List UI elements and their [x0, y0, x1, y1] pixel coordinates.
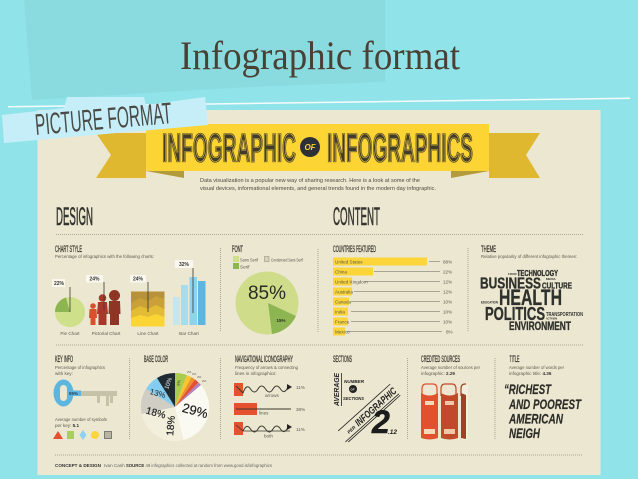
country percentages: 22% [443, 270, 452, 274]
panel: font [232, 244, 304, 334]
both row [234, 422, 305, 438]
chart captions: Pie Chart [60, 331, 80, 336]
value flags [52, 260, 193, 313]
font pie chart [236, 272, 298, 334]
panel: theme word cloud: THEME [481, 244, 496, 255]
panel: theme word cloud: EDUCATION [481, 300, 498, 304]
quote sample: AMERICAN [508, 410, 564, 426]
country bars [333, 258, 427, 336]
footer credits: CONCEPT & DESIGN Ivan Cash [55, 463, 125, 468]
base colour pie chart: 29% [181, 400, 210, 421]
panel: sections: SECTIONS [333, 354, 352, 365]
per infographic diagonal: INFOGRAPHIC [353, 386, 400, 429]
value 2.12 [371, 404, 397, 440]
arrows row [234, 383, 305, 398]
slide title: Infographic format [180, 33, 460, 78]
average typography: SECTIONS [343, 396, 364, 401]
base colour pie chart: 13% [149, 387, 167, 400]
panel: key info [53, 354, 117, 440]
banner of badge: OF [304, 143, 317, 152]
base colour pie chart: 18% [145, 406, 167, 422]
panel: title: TITLE [510, 354, 520, 365]
country percentages: 8% [446, 330, 453, 334]
country names: Mexico [335, 330, 350, 334]
panel: chart style: Percentage of infographics with the following charts: [55, 254, 154, 259]
panel: theme word cloud: POLITICS [485, 304, 545, 324]
country percentages [443, 260, 453, 334]
panel: base color [141, 354, 210, 441]
panel: title: Average number of words per [509, 365, 564, 370]
chart captions: Line Chart [137, 331, 159, 336]
country names: China [335, 270, 347, 274]
panel: navigational iconography [234, 354, 305, 438]
country names: Australia [335, 290, 353, 294]
country names: India [335, 310, 345, 314]
both row: 11% [296, 427, 305, 432]
country percentages: 10% [443, 310, 452, 314]
lines row: 38% [296, 407, 305, 412]
slide canvas: DESIGN [56, 203, 93, 231]
key symbols [53, 430, 112, 440]
country names: Canada [335, 300, 352, 304]
base colour pie chart: 2% [202, 379, 207, 383]
panel: credited sources [421, 354, 480, 440]
average typography: AVERAGE [332, 372, 341, 407]
country names: United States [335, 260, 363, 264]
country names: United Kingdom [335, 280, 368, 284]
pie chart [55, 297, 85, 327]
footer credits: SOURCE 49 infographics collected at random from www.good.is/infographics [126, 463, 273, 468]
panel: credited sources: infographic: 2.29 [421, 371, 455, 376]
quote sample: “RICHEST [504, 381, 552, 397]
panel: theme word cloud: TECHNOLOGY [517, 269, 558, 278]
panel: font: Serif [240, 264, 250, 270]
panel: title: infographic title: 4.36 [509, 371, 552, 376]
bar chart [173, 277, 206, 325]
chart captions: Pictorial Chart [92, 331, 121, 336]
panel: chart style: CHART STYLE [55, 244, 82, 255]
infographic paper panel [38, 110, 600, 475]
country percentages: 12% [443, 290, 452, 294]
font pie chart: 85% [248, 283, 286, 304]
slide canvas: NAVIGATIONAL ICONOGRAPHY [235, 354, 293, 365]
panel: theme word cloud: TRANSPORTATION [546, 312, 583, 318]
line chart [131, 292, 164, 326]
panel: chart style [52, 244, 206, 336]
icon: red books [421, 384, 468, 440]
panel: theme word cloud: BUSINESS [480, 276, 541, 292]
panel: base color: BASE COLOR [144, 354, 168, 365]
quote sample: NEIGH [509, 425, 541, 441]
panel: theme word cloud: Relative popularity of different infographic themes: [481, 254, 577, 259]
banner ribbon: INFOGRAPHICS [327, 126, 473, 170]
panel: theme word cloud: MEDIA [546, 277, 556, 281]
banner ribbon [96, 124, 540, 178]
chart captions [60, 331, 200, 336]
panel: countries featured [333, 244, 453, 336]
panel: key info: Percentage of infographics [55, 365, 106, 370]
country percentages: 10% [443, 300, 452, 304]
footer credits [55, 463, 273, 468]
panel: countries featured: COUNTRIES FEATURED [333, 244, 376, 255]
average typography: NUMBER [344, 379, 365, 384]
panel: navigational iconography: lines in infographics: [235, 371, 277, 376]
base colour pie chart: 2% [187, 370, 192, 374]
panel: theme word cloud [480, 244, 583, 333]
value flags: 24% [89, 276, 100, 282]
value flags: 32% [179, 262, 190, 268]
base colour pie chart: 18% [165, 415, 178, 436]
panel: key info: per key: 5.1 [55, 423, 79, 428]
panel: theme word cloud: FOOD [508, 272, 517, 276]
country names [335, 260, 368, 334]
panel: theme word cloud: HEALTH [499, 285, 562, 310]
intro text: Data visualization is a popular new way of sharing research. Here is a look at some of the [200, 178, 420, 184]
country percentages: 10% [443, 320, 452, 324]
intro text [200, 178, 436, 192]
panel: credited sources: CREDITED SOURCES [421, 354, 460, 365]
country percentages: 12% [443, 280, 452, 284]
average typography: OF [350, 388, 355, 392]
quote sample: AND POOREST [508, 396, 582, 412]
arrows row: arrows [265, 393, 279, 398]
lines row [234, 403, 305, 416]
panel: title [504, 354, 582, 441]
panel: sections [332, 354, 401, 443]
base colour pie chart: 6% [176, 379, 182, 386]
panel: key info: KEY INFO [55, 354, 73, 365]
base colour pie chart: 2% [192, 372, 197, 376]
panel: font: FONT [232, 244, 243, 255]
country percentages: 88% [443, 260, 452, 264]
value flags: 24% [133, 276, 144, 282]
intro text: visual devices, informational elements, and general trends found in the modern day infographic. [200, 186, 436, 192]
panel: theme word cloud: ENVIRONMENT [509, 321, 571, 333]
banner of badge [300, 137, 320, 157]
value 2.12: .12 [388, 429, 397, 436]
panel: font: Condensed Sans Serif [271, 258, 304, 262]
base colour pie chart: 10% [164, 376, 174, 390]
panel: font: Sans Serif [240, 258, 259, 262]
lines row: lines [259, 410, 269, 416]
picture format tape label [2, 97, 208, 143]
value flags: 22% [54, 281, 65, 287]
slide canvas: CONTENT [333, 203, 380, 231]
both row: both [264, 434, 273, 438]
base colour pie chart: 2% [197, 375, 202, 379]
average typography [332, 372, 365, 407]
arrows row: 11% [296, 385, 305, 390]
per infographic diagonal [337, 384, 401, 443]
panel: key info: Average number of symbols [55, 417, 108, 422]
banner ribbon: INFOGRAPHIC [162, 126, 296, 170]
picture format tape label: PICTURE FORMAT [34, 97, 173, 142]
panel: navigational iconography: Frequency of arrows & connecting [235, 365, 298, 370]
icon: key: 89% [69, 391, 78, 396]
panel: key info: with key: [55, 371, 73, 376]
panel: theme word cloud: ACTIVISM [546, 316, 557, 320]
base colour pie chart [141, 370, 210, 441]
panel: credited sources: Average number of sources per [421, 365, 480, 370]
font pie chart: 15% [276, 318, 286, 323]
quote sample [504, 381, 582, 441]
per infographic diagonal: PER [346, 424, 357, 435]
chart captions: Bar Chart [179, 331, 200, 336]
pictorial chart [89, 290, 120, 325]
panel: theme word cloud: CULTURE [542, 280, 572, 290]
value 2.12: 2 [371, 404, 390, 440]
country names: France [335, 320, 350, 324]
